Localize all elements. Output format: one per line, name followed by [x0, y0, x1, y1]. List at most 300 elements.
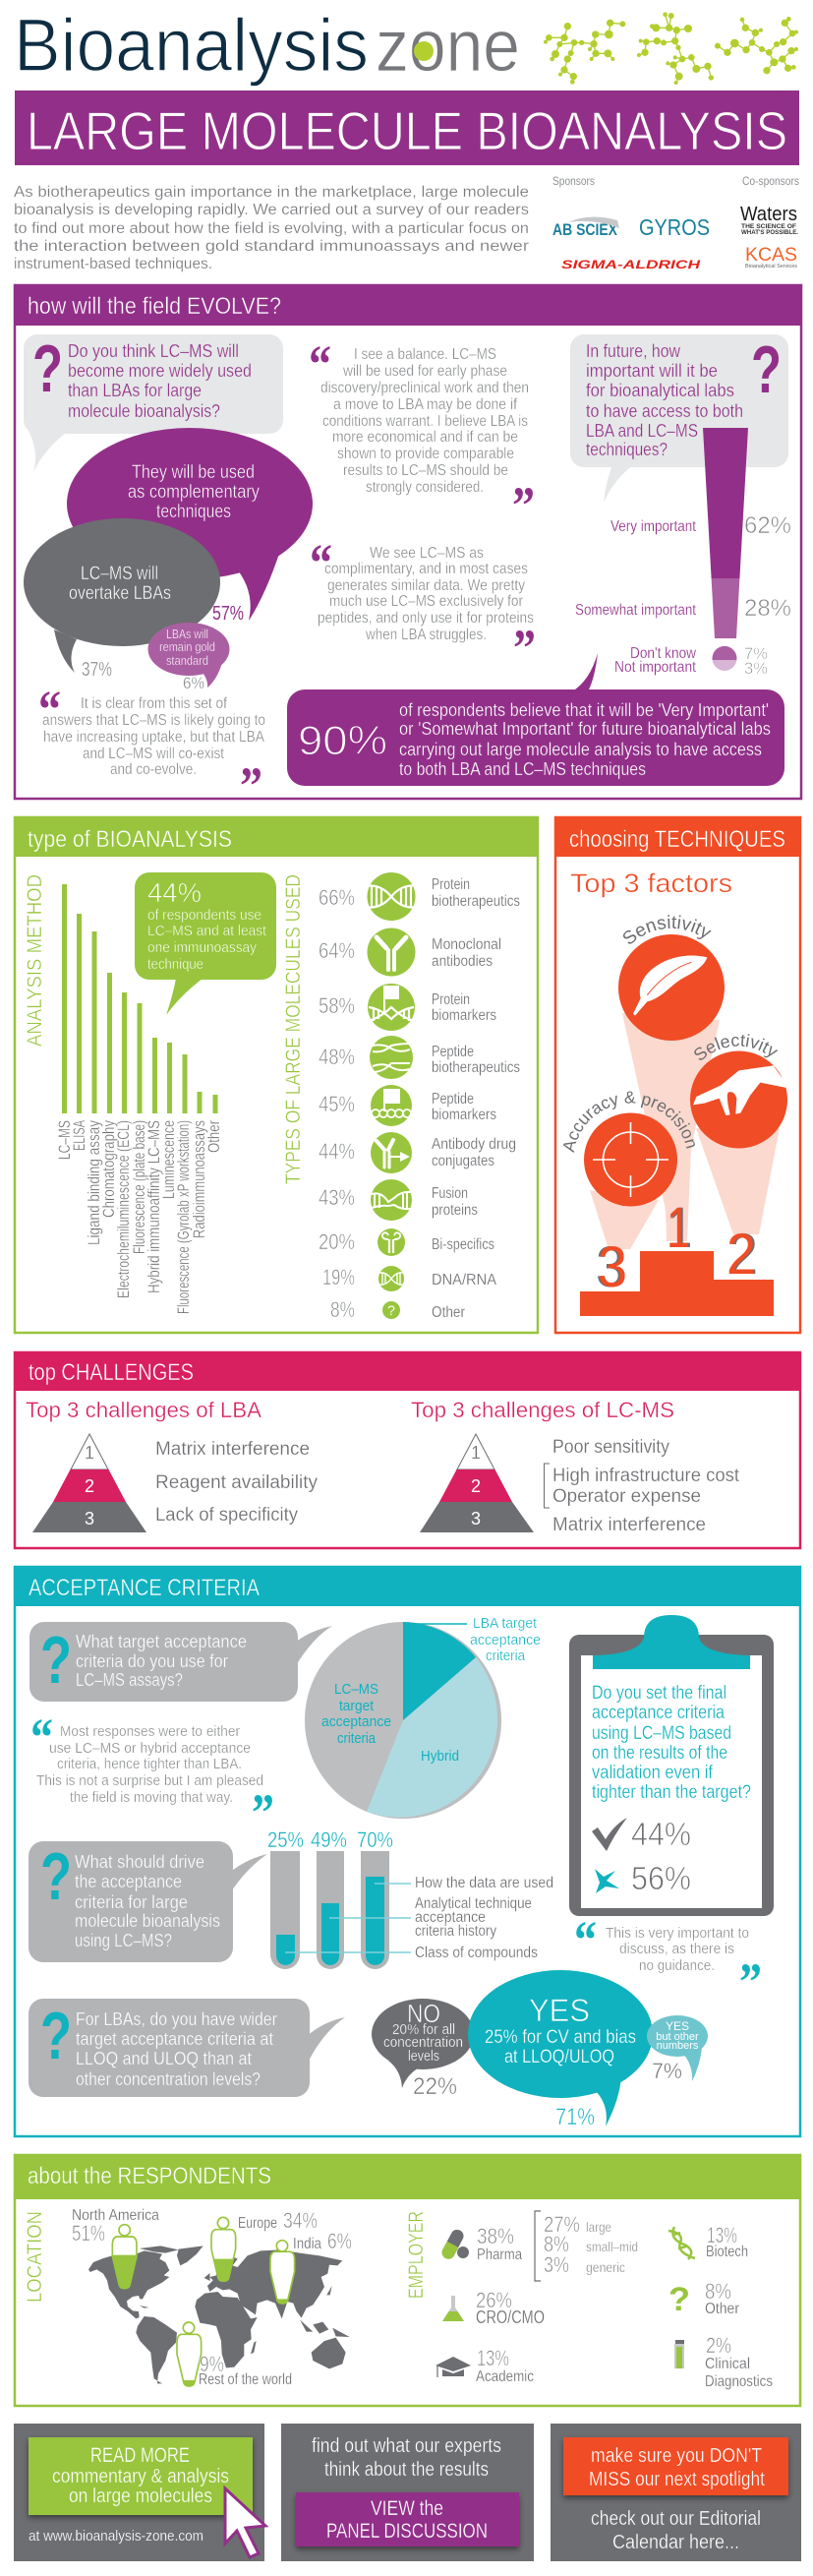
label: location: LOCATION	[24, 2211, 46, 2303]
bubble: YES but other numbers 7%	[647, 2015, 708, 2083]
pie chart: target acceptance criteria: Hybrid	[421, 1748, 459, 1765]
pyramid: LC-MS	[420, 1434, 534, 1532]
callout: 44% of respondents: 44%	[147, 877, 202, 908]
subheading: LC-MS challenges: Top 3 challenges of LC-MS	[411, 1398, 674, 1422]
labels: molecule types: antibodies	[432, 953, 493, 970]
pie chart: target acceptance criteria: acceptance	[321, 1713, 391, 1730]
sponsors: AB SCIEX	[552, 220, 618, 239]
panel: top challenges	[14, 1351, 801, 1548]
icon: accuracy target: Accuracy & precision	[563, 1092, 695, 1153]
bubble: YES 71%: at LLOQ/ULOQ	[504, 2047, 614, 2067]
pie chart: target acceptance criteria: LBA target	[473, 1615, 538, 1632]
intro text: As biotherapeutics gain importance in the marketplace, large molecule	[14, 184, 529, 201]
question box: what should drive: the acceptance	[75, 1872, 182, 1891]
spotlight beams	[590, 1013, 780, 1249]
bubble: LBAs gold standard 6%	[147, 623, 230, 692]
podium: 3	[598, 1235, 627, 1299]
labels: molecule types: proteins	[432, 1202, 478, 1219]
percentages: molecule types: 66%	[319, 885, 355, 910]
panel: acceptance criteria	[14, 1566, 801, 2136]
chart: test tubes: 70%	[357, 1827, 393, 1852]
quote: I see a balance: shown to provide comparable	[337, 446, 514, 462]
call to action: don't miss: check out our Editorial	[591, 2508, 761, 2530]
labels: molecule types	[432, 876, 520, 1321]
quote: coexist and co-evolve: and co-evolve.	[110, 761, 197, 778]
labels: molecule types: biomarkers	[432, 1007, 496, 1024]
question box: what should drive: molecule bioanalysis	[75, 1911, 220, 1931]
bubble: YES but other numbers 7%: but other	[656, 2031, 699, 2043]
call to action: don't miss: MISS our next spotlight	[589, 2469, 765, 2490]
pyramid: LBA: 2	[85, 1476, 94, 1496]
percentages: molecule types: 44%	[319, 1139, 355, 1164]
employer: other: Other	[705, 2301, 740, 2317]
call to action: panel discussion: find out what our experts	[312, 2435, 501, 2457]
question box: wider criteria: target acceptance criteria at	[76, 2029, 273, 2049]
intro text: the interaction between gold standard immunoassays and newer	[14, 238, 529, 255]
question box: what should drive: criteria for large	[75, 1892, 188, 1912]
quote: no guidance: ”	[739, 1952, 762, 2011]
icon: other	[382, 1301, 400, 1319]
callout: 90% of respondents: of respondents believe that it will be 'Very Important'	[399, 700, 769, 720]
bubble: complementary techniques 57%: 57%	[212, 603, 244, 625]
labels: molecule types: Protein	[432, 991, 470, 1008]
list: LC-MS challenges: Operator expense	[552, 1486, 701, 1507]
sponsors: Co-sponsors	[742, 174, 799, 188]
quote: I see a balance: more economical and if can be	[332, 429, 518, 446]
callout: 44% of respondents	[135, 872, 276, 1015]
bubble: LC-MS will overtake 37%: overtake LBAs	[69, 583, 171, 604]
quote: coexist and co-evolve: ”	[240, 756, 262, 815]
quote: coexist and co-evolve: have increasing uptake, but that LBA	[43, 729, 265, 746]
chart: importance funnel: 28%	[744, 595, 791, 622]
pie chart: target acceptance criteria: target	[339, 1698, 375, 1714]
chart: test tubes: criteria history	[415, 1923, 496, 1940]
quote: coexist and co-evolve: answers that LC–MS is likely going to	[42, 712, 265, 729]
employer: pharma: 3%	[544, 2252, 569, 2277]
bubble: NO 22%: concentration	[383, 2034, 463, 2051]
podium: 1	[667, 1196, 690, 1260]
logo: Bioanalysis zone: Bioanalysis	[14, 4, 369, 88]
labels: molecule types: Other	[432, 1304, 465, 1321]
call to action: don't miss: Calendar here...	[612, 2532, 739, 2553]
pie chart: target acceptance criteria: acceptance	[470, 1632, 541, 1648]
question box: future importance: techniques?	[586, 440, 668, 459]
bubble: LBAs gold standard 6%: LBAs will	[166, 628, 208, 641]
question box: what should drive: What should drive	[75, 1852, 204, 1872]
quote: tighter than LBA: “	[30, 1707, 53, 1767]
labels: molecule types: biotherapeutics	[432, 1059, 520, 1076]
quote: no guidance	[574, 1910, 762, 2011]
quote: I see a balance	[309, 334, 535, 535]
employer: pharma: large	[586, 2219, 611, 2235]
callout: 90% of respondents: carrying out large molecule analysis to have access	[399, 740, 762, 759]
callout: 44% of respondents: LC–MS and at least	[147, 923, 267, 939]
quote: I see a balance: strongly considered.	[366, 479, 484, 496]
pie chart: target acceptance criteria: criteria	[486, 1647, 526, 1664]
bubble: LBAs gold standard 6%: 6%	[183, 674, 204, 692]
panel: choosing techniques	[554, 816, 802, 1334]
bar chart: analysis method: Fluorescence (Gyrolab xP workstation)	[174, 1120, 193, 1314]
quote: I see a balance: ”	[512, 476, 535, 535]
quote: we see LC-MS as complimentary: when LBA struggles.	[365, 627, 487, 643]
podium: 1	[668, 1196, 692, 1260]
location labels: Europe	[238, 2215, 277, 2232]
bubble: NO 22%: levels	[408, 2048, 439, 2065]
quote: tighter than LBA: ”	[252, 1783, 274, 1842]
call to action: read more: on large molecules	[69, 2486, 212, 2507]
employer: pharma: 38%	[477, 2224, 514, 2248]
bubble: complementary techniques 57%: They will be used	[132, 462, 255, 483]
location labels: India	[293, 2236, 321, 2252]
bubble: NO 22%	[372, 1999, 474, 2100]
bubble: NO 22%: NO	[407, 1999, 440, 2028]
clipboard: final acceptance criteria: Do you set the final	[592, 1683, 726, 1704]
chart: test tubes: acceptance	[415, 1909, 486, 1926]
labels: molecule types: Bi-specifics	[432, 1236, 494, 1253]
person: Europe	[211, 2217, 236, 2281]
percentages: molecule types: 19%	[322, 1265, 355, 1289]
question box: future importance: important will it be	[586, 361, 718, 381]
bar chart: analysis method: Ligand binding assay	[85, 1120, 103, 1245]
pyramid: LC-MS: 2	[471, 1476, 481, 1496]
question box: target criteria: What target acceptance	[76, 1632, 247, 1651]
percentages: molecule types: 20%	[319, 1229, 355, 1254]
sponsors: SIGMA-ALDRICH	[561, 258, 700, 271]
bubble: YES 71%: 25% for CV and bias	[485, 2027, 636, 2048]
bubble: YES 71%	[468, 1970, 653, 2130]
subheading: top 3 factors: Top 3 factors	[570, 869, 732, 898]
question box: target criteria: LC–MS assays?	[76, 1670, 183, 1690]
percentages: molecule types: 43%	[319, 1185, 355, 1210]
intro text: instrument-based techniques.	[14, 256, 212, 272]
bubble: complementary techniques 57%: as complementary	[128, 482, 260, 503]
list: LC-MS challenges: Matrix interference	[552, 1515, 706, 1535]
chart: test tubes: 49%	[311, 1827, 347, 1852]
call to action: panel discussion: PANEL DISCUSSION	[326, 2520, 488, 2543]
pie chart: target acceptance criteria: criteria	[337, 1730, 377, 1747]
quote: we see LC-MS as complimentary	[310, 533, 536, 678]
bar chart: analysis method: Fluorescence (plate base)	[130, 1120, 148, 1254]
quote: we see LC-MS as complimentary: ”	[513, 619, 536, 678]
bar chart: analysis method: Luminescence	[159, 1120, 178, 1199]
question box: target criteria: criteria do you use for	[76, 1651, 228, 1671]
person: India	[270, 2241, 295, 2304]
heading: respondents: about the RESPONDENTS	[28, 2163, 271, 2189]
quote: I see a balance: results to LC–MS should be	[343, 462, 508, 479]
question box: what should drive: using LC–MS?	[75, 1931, 172, 1950]
icon: sensitivity feather	[618, 915, 725, 1041]
pyramid: LBA	[32, 1434, 146, 1532]
labels: molecule types: Protein	[432, 876, 470, 893]
sponsors: Bioanalytical Services	[745, 264, 797, 270]
employer: CRO/CMO: CRO/CMO	[476, 2307, 545, 2327]
percentages: molecule types	[319, 885, 355, 1322]
quote: we see LC-MS as complimentary: We see LC–MS as	[370, 545, 484, 562]
panel: type of bioanalysis	[14, 816, 539, 1333]
employer: other: ?	[668, 2281, 690, 2318]
quote: tighter than LBA	[30, 1707, 274, 1842]
quote: I see a balance: I see a balance. LC–MS	[354, 346, 496, 363]
label: employer: EMPLOYER	[405, 2211, 428, 2299]
bubble: LC-MS will overtake 37%: LC–MS will	[81, 564, 158, 584]
bar chart: analysis method: Hybrid immunoaffinity LC–MS	[145, 1120, 163, 1293]
employer: pharma: generic	[586, 2259, 625, 2275]
quote: tighter than LBA: use LC–MS or hybrid acceptance	[49, 1740, 251, 1757]
labels: molecule types: Peptide	[432, 1091, 474, 1108]
employer: CRO/CMO	[442, 2288, 545, 2327]
labels: molecule types: conjugates	[432, 1153, 494, 1169]
axis title: analysis method: ANALYSIS METHOD	[24, 874, 46, 1047]
percentages: molecule types: 64%	[319, 938, 355, 963]
icon: bi-specifics	[377, 1228, 405, 1256]
bar chart: analysis method: ELISA	[70, 1120, 88, 1151]
question box: LC-MS vs LBA: Do you think LC–MS will	[68, 341, 239, 361]
callout: 90% of respondents	[287, 653, 784, 786]
chart: importance funnel: Don't know	[630, 645, 696, 662]
location labels: 34%	[283, 2208, 318, 2233]
list: LC-MS challenges: High infrastructure cost	[552, 1466, 740, 1486]
intro text	[14, 184, 529, 272]
labels: molecule types: Fusion	[432, 1185, 468, 1202]
question box: future importance: to have access to both	[586, 401, 743, 421]
pie chart: target acceptance criteria	[305, 1615, 541, 1819]
percentages: molecule types: 8%	[330, 1297, 355, 1322]
sponsors: GYROS	[639, 214, 710, 240]
bar chart: analysis method: Electrochemiluminescence (ECL)	[114, 1120, 133, 1298]
callout: 44% of respondents: one immunoassay	[147, 939, 257, 956]
location labels: 9%	[200, 2352, 224, 2376]
location labels: 51%	[72, 2221, 105, 2246]
chart: test tubes: 25%	[267, 1827, 304, 1852]
podium	[580, 1196, 774, 1316]
bubble: YES 71%: YES	[529, 1993, 590, 2028]
percentages: molecule types: 58%	[319, 993, 355, 1018]
bubble: NO 22%: 22%	[413, 2073, 457, 2100]
icon: peptide biotherapeutics	[370, 1036, 413, 1079]
location labels	[72, 2207, 352, 2388]
heading: evolve: how will the field EVOLVE?	[28, 293, 281, 320]
quote: we see LC-MS as complimentary: peptides, and only use it for proteins	[318, 610, 534, 627]
icon: DNA/RNA	[378, 1266, 404, 1291]
quote: we see LC-MS as complimentary: much use LC–MS exclusively for	[329, 593, 523, 610]
quote: coexist and co-evolve: “	[38, 680, 61, 739]
callout: 90% of respondents: or 'Somewhat Important' for future bioanalytical labs	[399, 719, 771, 739]
location labels: North America	[72, 2207, 159, 2224]
bar chart: analysis method: LC–MS	[55, 1120, 74, 1160]
quote: we see LC-MS as complimentary: “	[310, 533, 332, 592]
panel: about the respondents	[14, 2154, 801, 2406]
employer: other: 8%	[705, 2279, 731, 2304]
employer: biotech: Biotech	[706, 2244, 748, 2260]
question box: wider criteria: other concentration levels?	[76, 2069, 261, 2089]
clipboard: final acceptance criteria: using LC–MS based	[592, 1723, 731, 1744]
employer: other	[668, 2279, 740, 2318]
percentages: molecule types: 48%	[319, 1045, 355, 1069]
employer: CRO/CMO: 26%	[476, 2288, 512, 2312]
call to action: panel discussion	[281, 2424, 534, 2561]
location labels: 6%	[327, 2229, 352, 2253]
sponsors: THE SCIENCE OF	[741, 223, 796, 230]
employer: pharma	[439, 2211, 638, 2281]
bubble: YES but other numbers 7%: YES	[666, 2019, 689, 2033]
icon: protein biotherapeutics	[368, 872, 415, 921]
bubble: YES but other numbers 7%: numbers	[657, 2040, 699, 2052]
logo: Bioanalysis zone: zone	[376, 5, 520, 87]
list: LC-MS challenges: Poor sensitivity	[552, 1437, 669, 1458]
pyramid: LC-MS: 1	[471, 1443, 481, 1463]
sponsors	[552, 174, 799, 271]
quote: coexist and co-evolve: and LC–MS will co-exist	[83, 746, 225, 762]
bubble: LC-MS will overtake 37%	[24, 518, 220, 681]
employer: pharma: 27%	[544, 2212, 580, 2237]
employer: biotech: 13%	[707, 2223, 737, 2247]
map: world with respondents	[88, 2217, 350, 2386]
clipboard: final acceptance criteria: on the results of the	[592, 1743, 727, 1764]
bubble: YES 71%: 71%	[555, 2104, 595, 2130]
question box: future importance: In future, how	[586, 341, 681, 361]
pie chart: target acceptance criteria: LC–MS	[334, 1681, 378, 1698]
question box: future importance: ?	[751, 332, 782, 407]
sponsors: WHAT'S POSSIBLE.	[741, 229, 798, 236]
question box: future importance: LBA and LC–MS	[586, 421, 698, 441]
icon: fusion proteins	[371, 1179, 412, 1221]
list: LBA challenges: Lack of specificity	[155, 1505, 298, 1526]
person: rest of the world	[177, 2322, 202, 2386]
bubble: NO 22%: 20% for all	[392, 2021, 455, 2038]
question box: target criteria	[29, 1622, 332, 1702]
clipboard: final acceptance criteria: tighter than the target?	[592, 1782, 751, 1803]
employer: pharma: 8%	[544, 2232, 569, 2256]
bubble: complementary techniques 57%: techniques	[156, 502, 231, 522]
chart: importance funnel: 3%	[744, 659, 768, 678]
quote: I see a balance: discovery/preclinical work and then	[320, 380, 529, 396]
quote: I see a balance: conditions warrant. I believe LBA is	[322, 413, 528, 430]
question box: what should drive	[29, 1839, 267, 1962]
chart: test tubes: How the data are used	[415, 1875, 553, 1891]
list: LC-MS challenges	[545, 1437, 740, 1535]
labels: molecule types: Peptide	[432, 1044, 474, 1060]
icon: monoclonal antibodies	[368, 929, 415, 976]
bubble: complementary techniques 57%	[67, 428, 313, 625]
podium: 2	[726, 1223, 756, 1287]
question box: wider criteria: ?	[40, 1999, 72, 2073]
quote: tighter than LBA: This is not a surprise but I am pleased	[36, 1772, 263, 1789]
panel: how will the field evolve	[14, 284, 801, 815]
icon: protein biomarkers	[368, 984, 415, 1031]
bar chart: analysis method: Radioimmunoassays	[190, 1120, 208, 1238]
podium: 3	[596, 1235, 625, 1299]
employer: clinical diagnostics: Diagnostics	[705, 2373, 773, 2390]
labels: molecule types: Antibody drug	[432, 1136, 516, 1153]
clipboard: final acceptance criteria: acceptance criteria	[592, 1703, 725, 1723]
call to action: read more: READ MORE	[90, 2444, 190, 2467]
callout: 90% of respondents: 90%	[298, 717, 387, 763]
chart: test tubes	[267, 1827, 553, 1969]
bar chart: analysis method: Other	[204, 1120, 223, 1153]
employer: clinical diagnostics: Clinical	[705, 2356, 750, 2372]
heading: bioanalysis: type of BIOANALYSIS	[28, 826, 232, 853]
icon: antibody drug conjugates	[371, 1132, 412, 1173]
icon: other: ?	[387, 1302, 395, 1318]
person: North America	[112, 2225, 137, 2289]
bubble: LBAs gold standard 6%: remain gold	[159, 640, 215, 654]
list: LBA challenges: Matrix interference	[155, 1439, 310, 1460]
list: LBA challenges: Reagent availability	[155, 1472, 319, 1493]
quote: tighter than LBA: the field is moving that way.	[70, 1789, 233, 1806]
quote: we see LC-MS as complimentary: complimentary, and in most cases	[324, 561, 528, 577]
chart: importance funnel: 62%	[744, 512, 791, 539]
quote: tighter than LBA: Most responses were to either	[60, 1723, 240, 1740]
call to action: read more: at www.bioanalysis-zone.com	[29, 2528, 203, 2545]
bubble: LBAs gold standard 6%: standard	[166, 654, 208, 668]
labels: molecule types: biomarkers	[432, 1107, 496, 1123]
employer: academic: 13%	[477, 2346, 509, 2370]
question box: LC-MS vs LBA: than LBAs for large	[68, 381, 202, 400]
icon: selectivity hand	[690, 1034, 787, 1149]
axis title: types of large molecules used: TYPES OF LARGE MOLECULES USED	[282, 874, 305, 1184]
percentages: molecule types: 45%	[319, 1092, 355, 1116]
question box: what should drive: ?	[40, 1839, 72, 1914]
question box: LC-MS vs LBA: become more widely used	[68, 361, 252, 381]
call to action: read more: commentary & analysis	[52, 2466, 229, 2487]
bubble: YES but other numbers 7%: 7%	[652, 2059, 682, 2083]
call to action: read more	[14, 2424, 265, 2561]
question box: target criteria: ?	[40, 1623, 72, 1698]
bubble: LC-MS will overtake 37%: 37%	[82, 659, 112, 681]
employer: pharma: Pharma	[477, 2247, 522, 2263]
question box: future importance	[570, 332, 788, 503]
icon: accuracy target	[563, 1092, 695, 1206]
pyramid: LBA: 1	[85, 1443, 94, 1463]
clipboard: final acceptance criteria: 56%	[631, 1860, 691, 1896]
clipboard: final acceptance criteria	[569, 1615, 774, 1916]
employer: biotech	[668, 2223, 748, 2260]
quote: tighter than LBA: criteria, hence tighter than LBA.	[57, 1756, 242, 1772]
quote: no guidance: This is very important to	[606, 1925, 749, 1942]
employer: clinical diagnostics: 2%	[706, 2333, 731, 2358]
icon: peptide biomarkers	[371, 1085, 412, 1126]
list: LBA challenges	[155, 1439, 319, 1526]
heading: acceptance: ACCEPTANCE CRITERIA	[29, 1575, 260, 1601]
quote: no guidance: “	[574, 1910, 597, 1969]
icon: sensitivity feather: Sensitivity	[623, 915, 712, 944]
call to action: panel discussion: VIEW the	[371, 2497, 443, 2520]
pyramid: LC-MS: 3	[471, 1509, 481, 1528]
quote: we see LC-MS as complimentary: generates similar data. We pretty	[327, 577, 525, 594]
chart: importance funnel: Very important	[610, 518, 696, 535]
chart: importance funnel: 7%	[744, 644, 768, 663]
quote: coexist and co-evolve: It is clear from this set of	[81, 695, 228, 712]
podium: 2	[728, 1223, 758, 1287]
intro text: to find out more about how the field is evolving, with a particular focus on	[14, 220, 529, 237]
quote: no guidance: discuss, as there is	[619, 1941, 734, 1957]
callout: 90% of respondents: to both LBA and LC–MS techniques	[399, 759, 646, 779]
question box: LC-MS vs LBA: molecule bioanalysis?	[68, 401, 220, 421]
question box: future importance: for bioanalytical labs	[586, 381, 734, 400]
question box: wider criteria: LLOQ and ULOQ than at	[76, 2049, 252, 2068]
icon: cursor	[225, 2488, 265, 2557]
bar chart: analysis method	[55, 884, 223, 1314]
icon: selectivity hand: Selectivity	[694, 1034, 779, 1060]
bar chart: analysis method: Chromatography	[99, 1120, 118, 1218]
chart: importance funnel: Not important	[614, 659, 696, 676]
sponsors: Waters	[740, 204, 797, 225]
employer: academic	[436, 2346, 534, 2385]
labels: molecule types: biotherapeutics	[432, 893, 520, 910]
question box: wider criteria: For LBAs, do you have wider	[76, 2009, 277, 2029]
callout: 44% of respondents: of respondents use	[147, 907, 261, 924]
pyramid: LBA: 3	[85, 1509, 94, 1528]
